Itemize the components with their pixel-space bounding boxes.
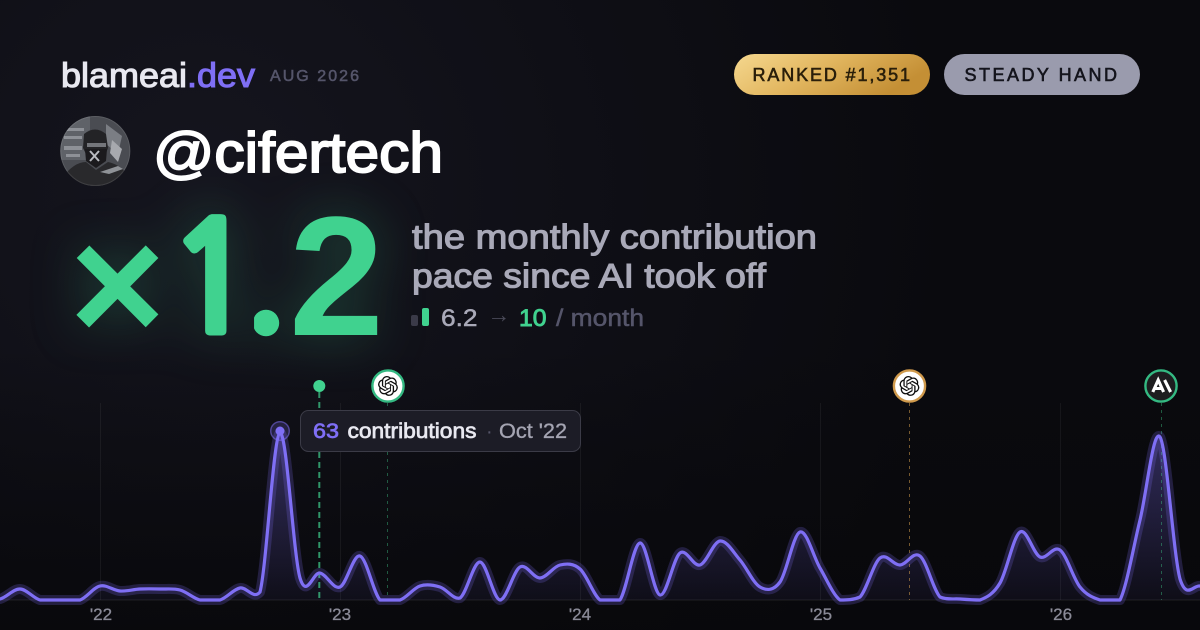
pace comparison: 10 xyxy=(519,305,546,332)
big multiplier: × xyxy=(70,193,165,376)
baseline xyxy=(0,599,1200,601)
icon: Anthropic marker xyxy=(1145,370,1177,402)
release marker line: OpenAI 2 xyxy=(908,403,910,600)
release marker line: green xyxy=(318,392,320,600)
tooltip: 63 xyxy=(313,420,339,443)
tooltip: · xyxy=(486,421,493,443)
description: pace since AI took off xyxy=(412,258,767,296)
description: the monthly contribution xyxy=(412,218,817,256)
icon: OpenAI marker 2 xyxy=(894,370,925,402)
brand logo: blameai xyxy=(61,57,187,95)
tooltip: Oct '22 xyxy=(499,420,567,443)
icon: mini bars xyxy=(411,308,429,326)
year labels xyxy=(90,605,1072,624)
tooltip: contributions xyxy=(348,420,476,443)
year labels: '22 xyxy=(90,605,112,624)
peak marker xyxy=(271,422,289,440)
year grid lines xyxy=(100,403,1060,600)
contribution curve xyxy=(0,433,1200,600)
pace comparison: 6.2 xyxy=(441,305,478,332)
big multiplier: 2 xyxy=(289,182,384,372)
release marker line: Anthropic xyxy=(1160,403,1162,600)
brand logo: .dev xyxy=(187,57,255,95)
release marker line: OpenAI 1 xyxy=(386,403,388,600)
big multiplier: . xyxy=(242,170,293,376)
year labels: '24 xyxy=(569,605,591,624)
tooltip xyxy=(300,410,580,452)
badge: rank xyxy=(734,54,930,95)
badge: archetype xyxy=(944,54,1140,95)
avatar xyxy=(60,116,132,190)
icon: OpenAI marker 1 xyxy=(372,370,404,402)
brand logo xyxy=(61,57,255,95)
area under curve xyxy=(0,433,1200,600)
big multiplier xyxy=(68,199,392,356)
year labels: '26 xyxy=(1050,605,1072,624)
pace comparison: / month xyxy=(556,305,644,332)
curve halo xyxy=(0,433,1200,600)
username: @cifertech xyxy=(153,121,443,185)
badge: archetype: STEADY HAND xyxy=(964,65,1117,85)
date label: AUG 2026 xyxy=(270,68,359,85)
badge: rank: RANKED #1,351 xyxy=(752,65,910,85)
pace comparison xyxy=(411,302,644,332)
description xyxy=(412,218,817,296)
chart xyxy=(0,370,1200,624)
pace comparison: → xyxy=(488,302,510,328)
year labels: '23 xyxy=(329,605,351,624)
year labels: '25 xyxy=(810,605,832,624)
marker dot: AI start xyxy=(313,380,325,392)
big multiplier: 1 xyxy=(166,204,259,356)
